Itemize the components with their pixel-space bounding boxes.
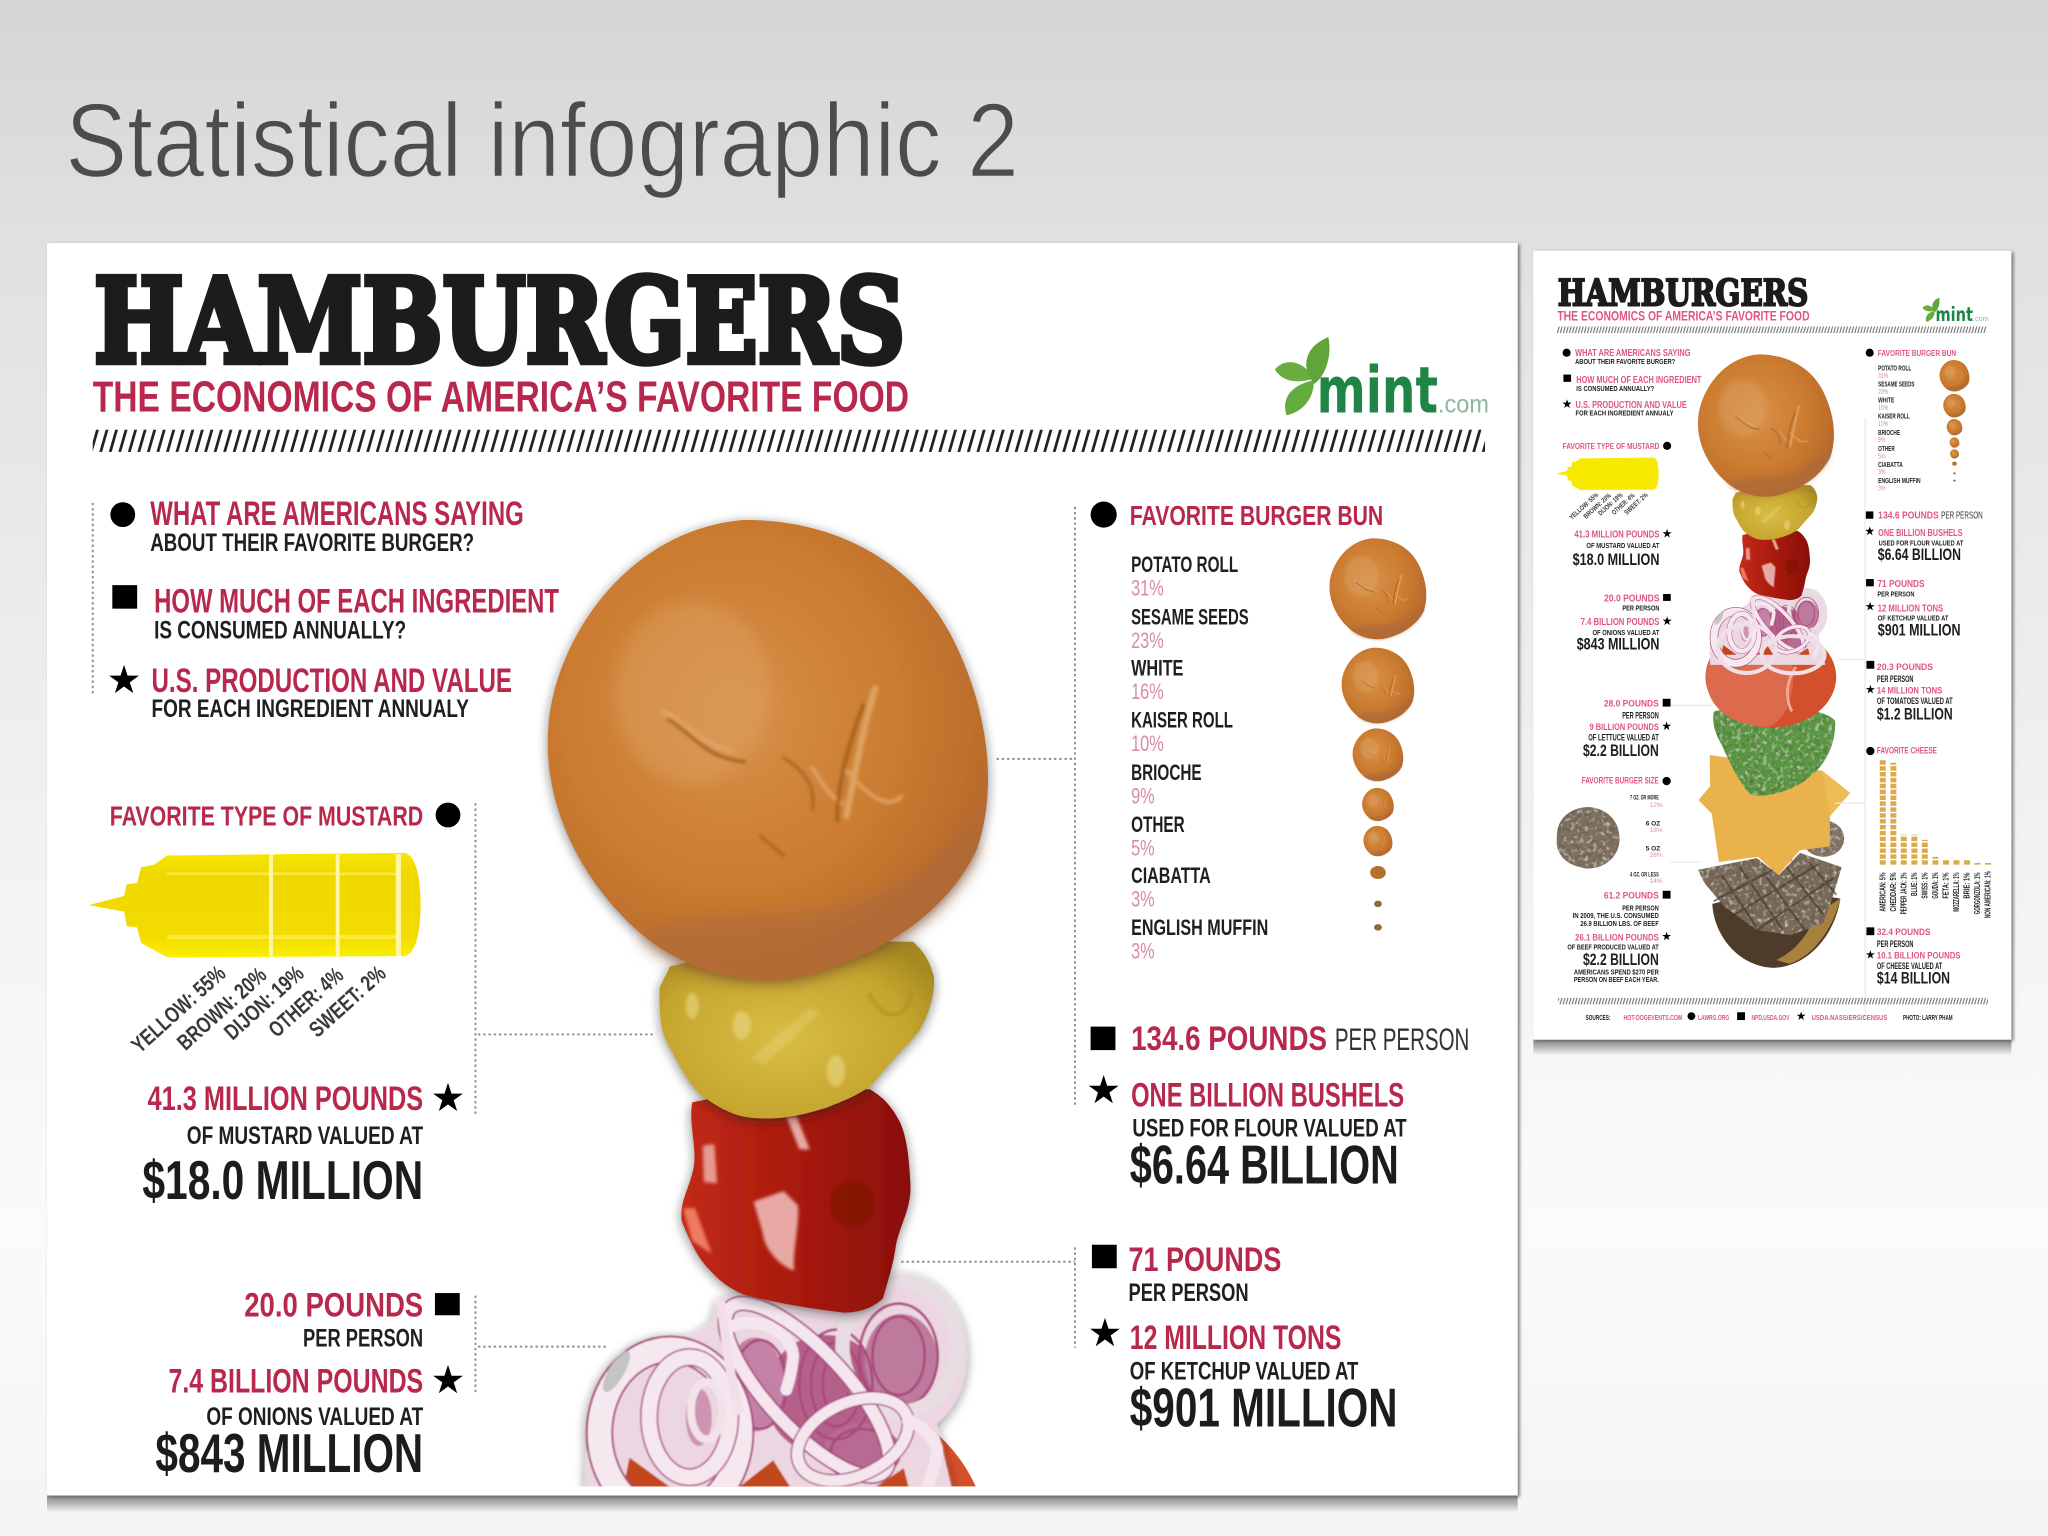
panel: bun miniature: 10% (1878, 421, 1888, 428)
stat: flour: ONE BILLION BUSHELS (1131, 1076, 1404, 1114)
panel: mustard miniature: 7.4 BILLION POUNDS (1581, 616, 1659, 628)
stat: beef (1567, 891, 1671, 984)
panel: bun miniature: 3% (1878, 485, 1885, 492)
stat: ketchup (1090, 1241, 1398, 1438)
logo: mint.com: .com (1438, 392, 1489, 419)
stat: mustard (142, 1080, 463, 1211)
panel: bun miniature: ENGLISH MUFFIN (1878, 478, 1921, 485)
stat: lettuce: PER PERSON (1622, 710, 1659, 720)
panel: favorite burger bun: WHITE (1131, 655, 1183, 680)
stats: right column miniature: PER PERSON (1877, 589, 1915, 598)
panel: favorite burger bun: ENGLISH MUFFIN (1131, 915, 1268, 940)
stat: tomatoes: PER PERSON (1877, 674, 1913, 684)
panel: mustard miniature: SWEET: 2% (1623, 492, 1650, 517)
panel: favorite burger bun: 5% (1131, 836, 1155, 861)
chart: favorite cheese (1866, 746, 1993, 918)
panel: favorite burger bun: BRIOCHE (1131, 760, 1202, 785)
stats: right column miniature: 12 MILLION TONS (1878, 602, 1943, 614)
legend: key questions: ABOUT THEIR FAVORITE BURGER? (150, 530, 474, 557)
sources row: USDA.NASS/ERS/CENSUS (1812, 1014, 1888, 1022)
panel: favorite mustard: YELLOW: 55% (126, 960, 231, 1058)
panel: favorite mustard: BROWN: 20% (172, 962, 271, 1055)
panel: bun miniature: 5% (1878, 453, 1885, 460)
sources row: LAWRG.ORG (1698, 1014, 1730, 1022)
panel: favorite burger size: 6 OZ (1646, 820, 1660, 827)
stat: onions: 20.0 POUNDS (244, 1287, 423, 1325)
panel: mustard miniature: $18.0 MILLION (1573, 550, 1659, 569)
stat: flour: USED FOR FLOUR VALUED AT (1132, 1115, 1407, 1142)
panel: favorite burger bun: 16% (1131, 679, 1164, 704)
icon: mustard bottle (89, 853, 421, 957)
stat: flour: PER PERSON (1335, 1022, 1469, 1057)
panel: mustard miniature: FAVORITE TYPE OF MUSTARD (1563, 441, 1659, 451)
stat: flour (1089, 1020, 1469, 1195)
panel: favorite burger size (1557, 776, 1671, 885)
burger upper layers and top of layout, at miniature scale (1556, 272, 1989, 728)
chart: favorite cheese: BLUE: 1% (1910, 872, 1919, 896)
panel: mustard miniature: DIJON: 19% (1597, 492, 1624, 517)
stat: onions: PER PERSON (303, 1326, 423, 1353)
burger stack photo (548, 520, 988, 1522)
panel: favorite burger bun: 3% (1131, 886, 1155, 911)
stats: right column miniature: 134.6 POUNDS (1878, 510, 1939, 522)
stat: mustard: OF MUSTARD VALUED AT (187, 1123, 423, 1150)
stat: ketchup: 71 POUNDS (1128, 1241, 1281, 1279)
panel: favorite burger bun: KAISER ROLL (1131, 708, 1233, 733)
stat: beef: OF BEEF PRODUCED VALUED AT (1567, 944, 1659, 952)
legend: key questions (109, 495, 559, 723)
panel: favorite mustard (89, 800, 460, 1058)
stats: right column miniature: PER PERSON (1941, 511, 1983, 522)
sources row (1586, 1011, 1953, 1022)
heading: hamburgers: HAMBURGERS (94, 254, 905, 390)
panel: favorite burger size: 18% (1650, 827, 1663, 834)
stat: ketchup: $901 MILLION (1130, 1376, 1398, 1438)
panel: favorite burger bun (1091, 500, 1426, 964)
chart: favorite cheese: AMERICAN: 5% (1878, 872, 1887, 912)
icon: scaled buns (1330, 538, 1426, 931)
subtitle: miniature: THE ECONOMICS OF AMERICA’S FAVORITE FOOD (1557, 309, 1810, 324)
panel: bun miniature: 9% (1878, 437, 1885, 444)
panel: full infographic thumbnail (1533, 251, 2011, 1055)
panel: bun miniature: BRIOCHE (1878, 430, 1900, 437)
panel: favorite burger bun: 10% (1131, 731, 1164, 756)
stat: beef: PERSON ON BEEF EACH YEAR. (1574, 976, 1659, 984)
logo: miniature: .com (1973, 314, 1989, 323)
chart: favorite cheese: SWISS: 1% (1920, 872, 1929, 899)
panel: bun miniature: FAVORITE BURGER BUN (1878, 348, 1956, 358)
title: Statistical infographic 2 (65, 82, 1019, 199)
chart: favorite cheese: GORGONZOLA: 1% (1973, 872, 1982, 914)
legend: key questions: HOW MUCH OF EACH INGREDIENT (154, 583, 559, 621)
stat: beef: 61.2 POUNDS (1604, 891, 1659, 901)
stat: flour: 134.6 POUNDS (1131, 1020, 1327, 1058)
chart: favorite cheese: FETA: 1% (1942, 872, 1951, 899)
legend: key questions: IS CONSUMED ANNUALLY? (154, 618, 406, 645)
stat: onions: OF ONIONS VALUED AT (206, 1404, 423, 1431)
panel: mustard miniature: BROWN: 20% (1583, 492, 1613, 521)
hatched rule: thumbnail bottom (1558, 998, 1988, 1004)
stats: right column miniature: ONE BILLION BUSHELS (1878, 527, 1963, 539)
stat: cheese: OF CHEESE VALUED AT (1877, 961, 1942, 971)
panel: favorite burger bun: FAVORITE BURGER BUN (1130, 500, 1383, 531)
hatched rule (93, 430, 1485, 452)
panel: mustard miniature: YELLOW: 55% (1569, 492, 1600, 521)
panel: mustard miniature: 20.0 POUNDS (1604, 592, 1659, 604)
sources row: HOT-DOGEVENTS.COM (1624, 1014, 1682, 1022)
legend: key questions: FOR EACH INGREDIENT ANNUALY (152, 696, 469, 723)
stat: cheese: PER PERSON (1877, 939, 1913, 949)
panel: favorite burger size: 12% (1650, 802, 1663, 809)
panel: bun miniature: OTHER (1878, 446, 1895, 453)
chart: favorite cheese: MOZZARELLA: 1% (1952, 872, 1961, 912)
panel: mustard miniature: OTHER: 4% (1611, 492, 1637, 517)
panel: mustard miniature: OF MUSTARD VALUED AT (1586, 541, 1660, 550)
panel: favorite burger size: 28% (1650, 852, 1663, 859)
panel: favorite burger bun: 23% (1131, 628, 1164, 653)
panel: favorite burger size: 7 OZ. OR MORE (1630, 794, 1659, 801)
stat: beef: 26.9 BILLION LBS. OF BEEF (1580, 920, 1659, 928)
panel: favorite burger size: 4 OZ. OR LESS (1630, 871, 1659, 878)
stat: beef: 26.1 BILLION POUNDS (1575, 932, 1659, 942)
chart: favorite cheese: PEPPER JACK: 1% (1899, 872, 1908, 914)
stat: cheese: 32.4 POUNDS (1877, 927, 1930, 937)
chart: favorite cheese: FAVORITE CHEESE (1877, 746, 1937, 756)
stat: cheese: $14 BILLION (1877, 969, 1950, 988)
panel: bun miniature: KAISER ROLL (1878, 414, 1910, 421)
chart: favorite cheese: CHEDDAR: 5% (1889, 872, 1898, 912)
chart: favorite cheese: GOUDA: 1% (1931, 872, 1940, 899)
logo: miniature: mint (1936, 303, 1973, 326)
stat: tomatoes: OF TOMATOES VALUED AT (1877, 696, 1953, 706)
panel: bun miniature: WHITE (1878, 397, 1895, 405)
chart: favorite cheese: BRIE: 1% (1963, 872, 1972, 899)
legend: miniature: IS CONSUMED ANNUALLY? (1576, 384, 1654, 393)
logo: mint.com: mint (1317, 355, 1438, 429)
panel: favorite burger bun: 31% (1131, 576, 1164, 601)
stat: beef: PER PERSON (1622, 904, 1659, 912)
panel: favorite burger bun: CIABATTA (1131, 863, 1211, 888)
stat: lettuce (1583, 699, 1671, 760)
panel: favorite mustard: OTHER: 4% (264, 962, 348, 1042)
hatched rule: thumbnail top (1557, 327, 1987, 333)
panel: favorite mustard: FAVORITE TYPE OF MUSTARD (110, 800, 423, 831)
stats: right column miniature (1865, 510, 1983, 639)
panel: enlarged infographic (47, 243, 1518, 1522)
legend: miniature: ABOUT THEIR FAVORITE BURGER? (1575, 357, 1675, 366)
panel: favorite burger bun: OTHER (1131, 812, 1185, 837)
dotted connectors (93, 503, 1075, 1395)
sources row: SOURCES: (1586, 1014, 1610, 1022)
stats: right column miniature: $6.64 BILLION (1878, 545, 1961, 564)
panel: mustard miniature: OF ONIONS VALUED AT (1592, 628, 1660, 637)
sources row: NPD.USDA.GOV (1752, 1014, 1790, 1022)
legend: miniature: HOW MUCH OF EACH INGREDIENT (1576, 374, 1702, 386)
stat: ketchup: PER PERSON (1128, 1280, 1249, 1307)
legend: miniature (1562, 347, 1702, 417)
stat: ketchup: 12 MILLION TONS (1130, 1319, 1341, 1357)
panel: bun miniature (1866, 348, 1969, 492)
panel: bun miniature: POTATO ROLL (1878, 366, 1911, 373)
panel: mustard miniature: $843 MILLION (1577, 634, 1659, 654)
stat: beef: AMERICANS SPEND $270 PER (1574, 968, 1659, 976)
panel: mustard miniature (1556, 441, 1672, 654)
subtitle: THE ECONOMICS OF AMERICA’S FAVORITE FOOD (93, 373, 909, 421)
sources row: PHOTO: LARRY PHAM (1903, 1014, 1953, 1022)
stat: beef: $2.2 BILLION (1583, 950, 1659, 969)
panel: bun miniature: 3% (1878, 469, 1885, 476)
stat: tomatoes: 14 MILLION TONS (1877, 686, 1942, 696)
logo: mint.com (1275, 337, 1489, 429)
stat: beef: IN 2009, THE U.S. CONSUMED (1573, 912, 1659, 920)
panel: favorite burger bun: SESAME SEEDS (1131, 604, 1249, 629)
stat: tomatoes: 20.3 POUNDS (1877, 662, 1933, 672)
panel: favorite burger bun: POTATO ROLL (1131, 552, 1238, 577)
panel: bun miniature: 23% (1878, 389, 1888, 396)
panel: favorite burger bun: 9% (1131, 783, 1155, 808)
stats: right column miniature: 71 POUNDS (1877, 578, 1925, 590)
icon: beef patty (1557, 807, 1620, 869)
panel: bun miniature: CIABATTA (1878, 462, 1903, 469)
panel: favorite mustard: DIJON: 19% (219, 960, 309, 1045)
panel: favorite burger size: 14% (1650, 878, 1663, 885)
panel: mustard miniature: 41.3 MILLION POUNDS (1574, 528, 1659, 540)
heading: miniature: HAMBURGERS (1558, 272, 1808, 314)
stat: mustard: $18.0 MILLION (142, 1149, 423, 1211)
stat: onions: $843 MILLION (155, 1422, 423, 1484)
chart: favorite cheese: NON AMERICAN: 1% (1984, 871, 1993, 918)
stat: lettuce: 9 BILLION POUNDS (1590, 722, 1659, 732)
stat: flour: $6.64 BILLION (1130, 1133, 1399, 1195)
panel: mustard miniature: PER PERSON (1622, 604, 1660, 613)
stat: lettuce: OF LETTUCE VALUED AT (1588, 733, 1659, 743)
panel: favorite burger size: 5 OZ (1646, 845, 1660, 852)
stat: tomatoes: $1.2 BILLION (1877, 705, 1953, 724)
stat: cheese (1866, 927, 1960, 988)
panel: bun miniature: SESAME SEEDS (1878, 382, 1915, 389)
panel: favorite mustard: SWEET: 2% (304, 960, 391, 1042)
panel: favorite burger bun: 3% (1131, 939, 1155, 964)
legend: key questions: WHAT ARE AMERICANS SAYING (150, 495, 524, 533)
stat: cheese: 10.1 BILLION POUNDS (1877, 951, 1960, 961)
stat: mustard: 41.3 MILLION POUNDS (148, 1080, 423, 1118)
thumbnail connectors (1671, 418, 1865, 1019)
stat: onions: 7.4 BILLION POUNDS (168, 1362, 423, 1400)
panel: favorite burger size: FAVORITE BURGER SIZE (1582, 776, 1659, 786)
legend: miniature: U.S. PRODUCTION AND VALUE (1576, 399, 1687, 411)
stat: ketchup: OF KETCHUP VALUED AT (1130, 1358, 1358, 1385)
stat: onions (155, 1287, 463, 1484)
stat: lettuce: 28.0 POUNDS (1604, 699, 1659, 709)
legend: key questions: U.S. PRODUCTION AND VALUE (152, 662, 512, 700)
stats: right column miniature: OF KETCHUP VALUED AT (1878, 614, 1949, 623)
stat: tomatoes (1866, 661, 1953, 724)
stats: right column miniature: $901 MILLION (1878, 620, 1961, 639)
legend: miniature: WHAT ARE AMERICANS SAYING (1575, 347, 1691, 359)
burger lower layers (1698, 707, 1850, 968)
legend: miniature: FOR EACH INGREDIENT ANNUALY (1576, 408, 1674, 417)
panel: bun miniature: 31% (1878, 373, 1888, 380)
logo: miniature (1923, 298, 1989, 326)
stat: lettuce: $2.2 BILLION (1583, 741, 1659, 760)
stats: right column miniature: USED FOR FLOUR VALUED AT (1879, 538, 1964, 547)
panel: bun miniature: 16% (1878, 405, 1888, 412)
